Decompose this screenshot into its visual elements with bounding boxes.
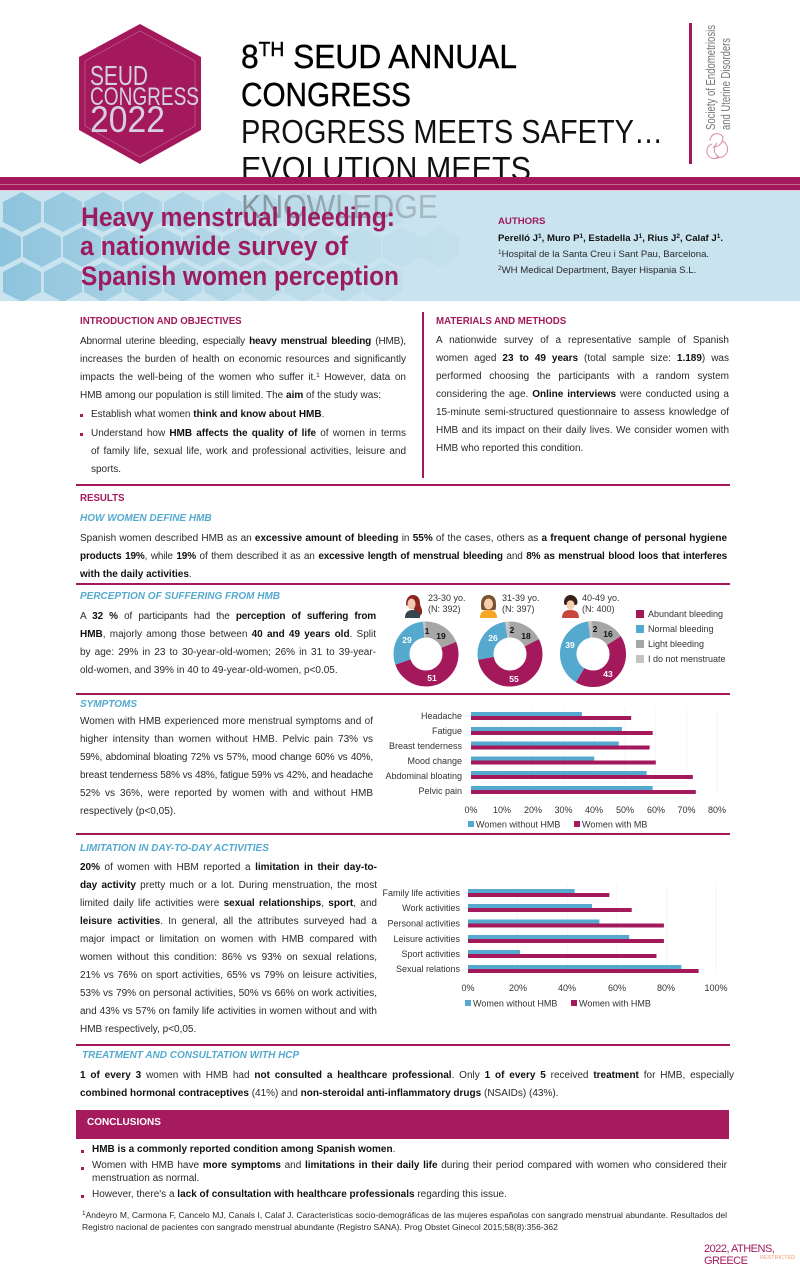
bar chart: limitation in activities	[382, 884, 728, 1008]
age group 31-39: 31-39 yo.	[502, 593, 540, 603]
authors: Perelló J1, Muro P1, Estadella J1, Rius J2, Calaf J1.	[498, 233, 723, 244]
congress logo hexagon: SEUD	[90, 60, 148, 91]
donut legend	[636, 609, 726, 664]
bar chart: symptoms: Pelvic pain	[418, 786, 462, 796]
donut legend: Abundant bleeding	[648, 609, 723, 619]
age group 40-49	[562, 593, 620, 679]
bar chart: symptoms: Headache	[421, 711, 462, 721]
age group 23-30: 19	[436, 631, 446, 641]
donut legend: Normal bleeding	[648, 624, 714, 634]
bar chart: symptoms: 30%	[554, 805, 573, 815]
text: limitation: 53% vs 79% on personal activities, 50% vs 66% on work activities,	[80, 988, 377, 999]
age group 31-39: 26	[488, 633, 498, 643]
text: introduction: sports.	[91, 464, 121, 475]
text: limitation: HMB respectively, p<0,05.	[80, 1024, 196, 1035]
congress title: TH	[259, 39, 284, 61]
text: conclusions: menstruation as normal.	[92, 1173, 199, 1184]
text: definition: Spanish women described HMB as an excessive amount of bleeding in 55% of the cases, others as a frequent change of personal hygiene	[80, 533, 727, 544]
bar chart: limitation in activities: Women without HMB	[473, 998, 557, 1008]
text: introduction: Establish what women think and know about HMB.	[91, 409, 324, 420]
age group 40-49: 43	[603, 669, 613, 679]
rule	[76, 583, 730, 584]
bar chart: symptoms: Fatigue	[432, 726, 462, 736]
authors: 1Hospital de la Santa Creu i Sant Pau, Barcelona.	[498, 249, 709, 260]
bar chart: symptoms: Abdominal bloating	[385, 771, 462, 781]
bar chart: symptoms: 60%	[647, 805, 665, 815]
subheading: treatment: TREATMENT AND CONSULTATION WITH HCP	[82, 1050, 299, 1061]
bar chart: symptoms: 20%	[524, 805, 542, 815]
text: limitation: 21% vs 76% on sport activities, 65% vs 79% on leisure activities,	[80, 970, 377, 981]
bar chart: limitation in activities: Family life activities	[382, 888, 460, 898]
text: limitation: day activity pretty much or a lot. During menstruation, the most	[80, 880, 377, 891]
heading: introduction: INTRODUCTION AND OBJECTIVES	[80, 316, 242, 327]
bar chart: limitation in activities: Sexual relations	[396, 964, 460, 974]
congress logo hexagon: 2022	[90, 99, 165, 140]
congress title: SEUD ANNUAL	[284, 38, 517, 75]
text: treatment: combined hormonal contraceptives (41%) and non-steroidal anti-inflammatory drugs (NSAIDs) (43%).	[80, 1088, 558, 1099]
age group 23-30	[402, 593, 466, 683]
text: definition	[80, 533, 727, 580]
donut legend: I do not menstruate	[648, 654, 726, 664]
age group 40-49: 40-49 yo.	[582, 593, 620, 603]
subheading: limitation: LIMITATION IN DAY-TO-DAY ACTIVITIES	[80, 843, 269, 854]
age group 23-30: 1	[425, 626, 430, 636]
text: symptoms: Women with HMB experienced more menstrual symptoms and of	[80, 716, 373, 727]
text: introduction: HMB among our population is still limited. The aim of the study was:	[80, 390, 381, 401]
text: definition: products 19%, while 19% of them described it as an excessive length of menstrual bleeding and 8% as menstrual blood loos that interferes	[80, 551, 727, 562]
age group 31-39	[480, 593, 540, 684]
magenta divider bar	[0, 177, 800, 191]
bar chart: limitation in activities: Sport activities	[401, 949, 460, 959]
text: treatment: 1 of every 3 women with HMB had not consulted a healthcare professional. Only 1 of every 5 received treatment for HMB, especially	[80, 1070, 734, 1081]
text: conclusions: However, there's a lack of consultation with healthcare professionals regarding this issue.	[92, 1189, 507, 1200]
conclusions banner	[76, 1110, 729, 1139]
age group 23-30: 23-30 yo.	[428, 593, 466, 603]
text: limitation: and 43% vs 57% on family life activities in women without and with	[80, 1006, 377, 1017]
bar chart: limitation in activities: 0%	[461, 983, 475, 993]
reference: 1Andeyro M, Carmona F, Cancelo MJ, Canals I, Calaf J. Características socio-demográficas de las mujeres españolas con sangrado menstrual abundante. Resultados del	[82, 1210, 727, 1220]
text: introduction	[80, 336, 406, 475]
text: materials and methods: 15-minute semi-structured questionnaire to assess knowledge of	[436, 407, 729, 418]
bar chart: limitation in activities: 100%	[704, 983, 728, 993]
congress title: 8	[241, 38, 259, 75]
blue title band	[0, 191, 800, 301]
subheading: symptoms: SYMPTOMS	[80, 699, 137, 710]
text: materials and methods: HMB who reported this condition.	[436, 443, 583, 454]
text: materials and methods	[436, 335, 730, 454]
text: limitation: leisure activities. In general, all the attributes surveyed had a	[80, 916, 377, 927]
text: limitation	[80, 862, 377, 1035]
bar chart: symptoms: 80%	[708, 805, 726, 815]
text: materials and methods: considering the age. Online interviews were conducted using a	[436, 389, 729, 400]
conclusions banner: CONCLUSIONS	[87, 1117, 161, 1128]
text: conclusions: Women with HMB have more symptoms and limitations in their daily life during their period compared with women who considered their	[92, 1160, 727, 1171]
text: symptoms	[80, 716, 374, 817]
age group 40-49: 2	[593, 624, 598, 634]
text: conclusions	[81, 1144, 727, 1200]
age group 31-39: 2	[510, 625, 515, 635]
footer location: 2022, ATHENS,	[704, 1243, 774, 1255]
heading: materials and methods: MATERIALS AND METHODS	[436, 316, 566, 327]
bar chart: limitation in activities: 80%	[657, 983, 675, 993]
heading: results: RESULTS	[80, 493, 124, 504]
text: limitation: limited daily life activities were sexual relationships, sport, and	[80, 898, 377, 909]
authors	[498, 216, 723, 276]
bar chart: limitation in activities: 60%	[608, 983, 626, 993]
bar chart: symptoms: Mood change	[407, 756, 462, 766]
text: symptoms: 52% vs 36%, were reported by women with and without HMB	[80, 788, 373, 799]
bar chart: symptoms	[385, 708, 726, 830]
text: limitation: major impact or limitation on women with HMB compared with	[80, 934, 377, 945]
poster title	[80, 202, 399, 291]
donut charts by age group	[394, 593, 726, 687]
bar chart: symptoms: 50%	[616, 805, 634, 815]
bar chart: limitation in activities: Personal activities	[387, 918, 460, 928]
congress title	[241, 38, 663, 177]
age group 31-39: 55	[509, 674, 519, 684]
congress title: CONGRESS	[241, 76, 411, 113]
bar chart: limitation in activities: 40%	[558, 983, 576, 993]
bar chart: limitation in activities: Women with HMB	[579, 998, 651, 1008]
text: materials and methods: A nationwide survey of a representative sample of Spanish	[436, 335, 729, 346]
age group 40-49: 16	[603, 629, 613, 639]
text: introduction: impacts the well-being of the women who suffer it.1 However, data on	[80, 372, 406, 383]
text: perception: A 32 % of participants had the perception of suffering from	[80, 611, 376, 622]
bar chart: symptoms: 10%	[493, 805, 511, 815]
restricted mark: RESTRICTED	[760, 1255, 795, 1261]
age group 23-30: 51	[427, 673, 437, 683]
text: perception: by age: 29% in 23 to 30-year-old-women; 26% in 31 to 39-year-	[80, 647, 376, 658]
age group 23-30: 29	[402, 635, 412, 645]
age group 23-30: (N: 392)	[428, 604, 461, 614]
hexagon pattern	[0, 192, 398, 301]
text: conclusions: HMB is a commonly reported condition among Spanish women.	[92, 1144, 395, 1155]
subheading: how women define HMB: HOW WOMEN DEFINE HMB	[80, 513, 212, 524]
bar chart: symptoms: Breast tenderness	[389, 741, 462, 751]
reference	[82, 1210, 727, 1232]
rule	[76, 833, 730, 834]
footer location	[704, 1243, 774, 1264]
text: perception: HMB, majorly among those between 40 and 49 years old. Split	[80, 629, 376, 640]
age group 31-39: (N: 397)	[502, 604, 535, 614]
text: symptoms: higher intensity than women without HMB. Pelvic pain 73% vs	[80, 734, 373, 745]
text: perception: old-women, and 39% in 40 to 49-year-old-women, p<0.05.	[80, 665, 338, 676]
bar chart: limitation in activities: Leisure activities	[393, 934, 460, 944]
rule	[76, 484, 730, 486]
text: symptoms: respectively (p<0,05).	[80, 806, 176, 817]
poster title: a nationwide survey of	[80, 231, 349, 261]
donut legend: Light bleeding	[648, 639, 704, 649]
authors: AUTHORS	[498, 216, 545, 227]
age group 40-49: 39	[565, 640, 575, 650]
text: symptoms: breast tenderness 58% vs 48%, fatigue 59% vs 42%, and headache	[80, 770, 373, 781]
congress logo hexagon	[79, 24, 201, 164]
rule	[76, 693, 730, 694]
authors: 2WH Medical Department, Bayer Hispania S.L.	[498, 265, 696, 276]
divider: columns	[422, 312, 424, 478]
text: perception	[80, 611, 376, 676]
text: materials and methods: HMB and its impact on their daily lives. We consider women with	[436, 425, 729, 436]
text: treatment	[80, 1070, 734, 1099]
bar chart: symptoms: Women with MB	[582, 820, 647, 830]
text: introduction: Abnormal uterine bleeding, especially heavy menstrual bleeding (HMB),	[80, 336, 406, 347]
reference: Registro nacional de pacientes con sangrado menstrual abundante (Registro SANA). Prog Obstet Ginecol 2015;58(8):356-362	[82, 1222, 558, 1232]
text: limitation: 20% of women with HBM reported a limitation in their day-to-	[80, 862, 377, 873]
age group 40-49: (N: 400)	[582, 604, 615, 614]
text: introduction: of family life, sexual life, work and professional activities, leisure and	[91, 446, 406, 457]
bar chart: limitation in activities: 20%	[509, 983, 527, 993]
text: symptoms: 59%, abdominal bloating 72% vs 57%, mood change 60% vs 40%,	[80, 752, 373, 763]
text: materials and methods: women aged 23 to 49 years (total sample size: 1.189) was	[436, 353, 729, 364]
bar chart: symptoms: 0%	[464, 805, 478, 815]
text: materials and methods: performed choosing the participants with a random system	[436, 371, 729, 382]
society logo	[689, 23, 733, 164]
age group 31-39: 18	[521, 631, 531, 641]
poster title: Heavy menstrual bleeding:	[81, 202, 395, 232]
rule	[76, 1044, 730, 1046]
subheading: perception: PERCEPTION OF SUFFERING FROM HMB	[80, 591, 280, 602]
bar chart: limitation in activities: Work activities	[402, 903, 460, 913]
text: introduction: Understand how HMB affects the quality of life of women in terms	[91, 428, 406, 439]
bar chart: symptoms: Women without HMB	[476, 820, 560, 830]
bar chart: symptoms: 70%	[677, 805, 696, 815]
bar chart: symptoms: 40%	[585, 805, 603, 815]
text: limitation: women without this condition: 86% vs 93% on sexual relations,	[80, 952, 377, 963]
text: introduction: increases the burden of health on economic resources and significantly	[80, 354, 406, 365]
text: definition: with the daily activities.	[80, 569, 192, 580]
